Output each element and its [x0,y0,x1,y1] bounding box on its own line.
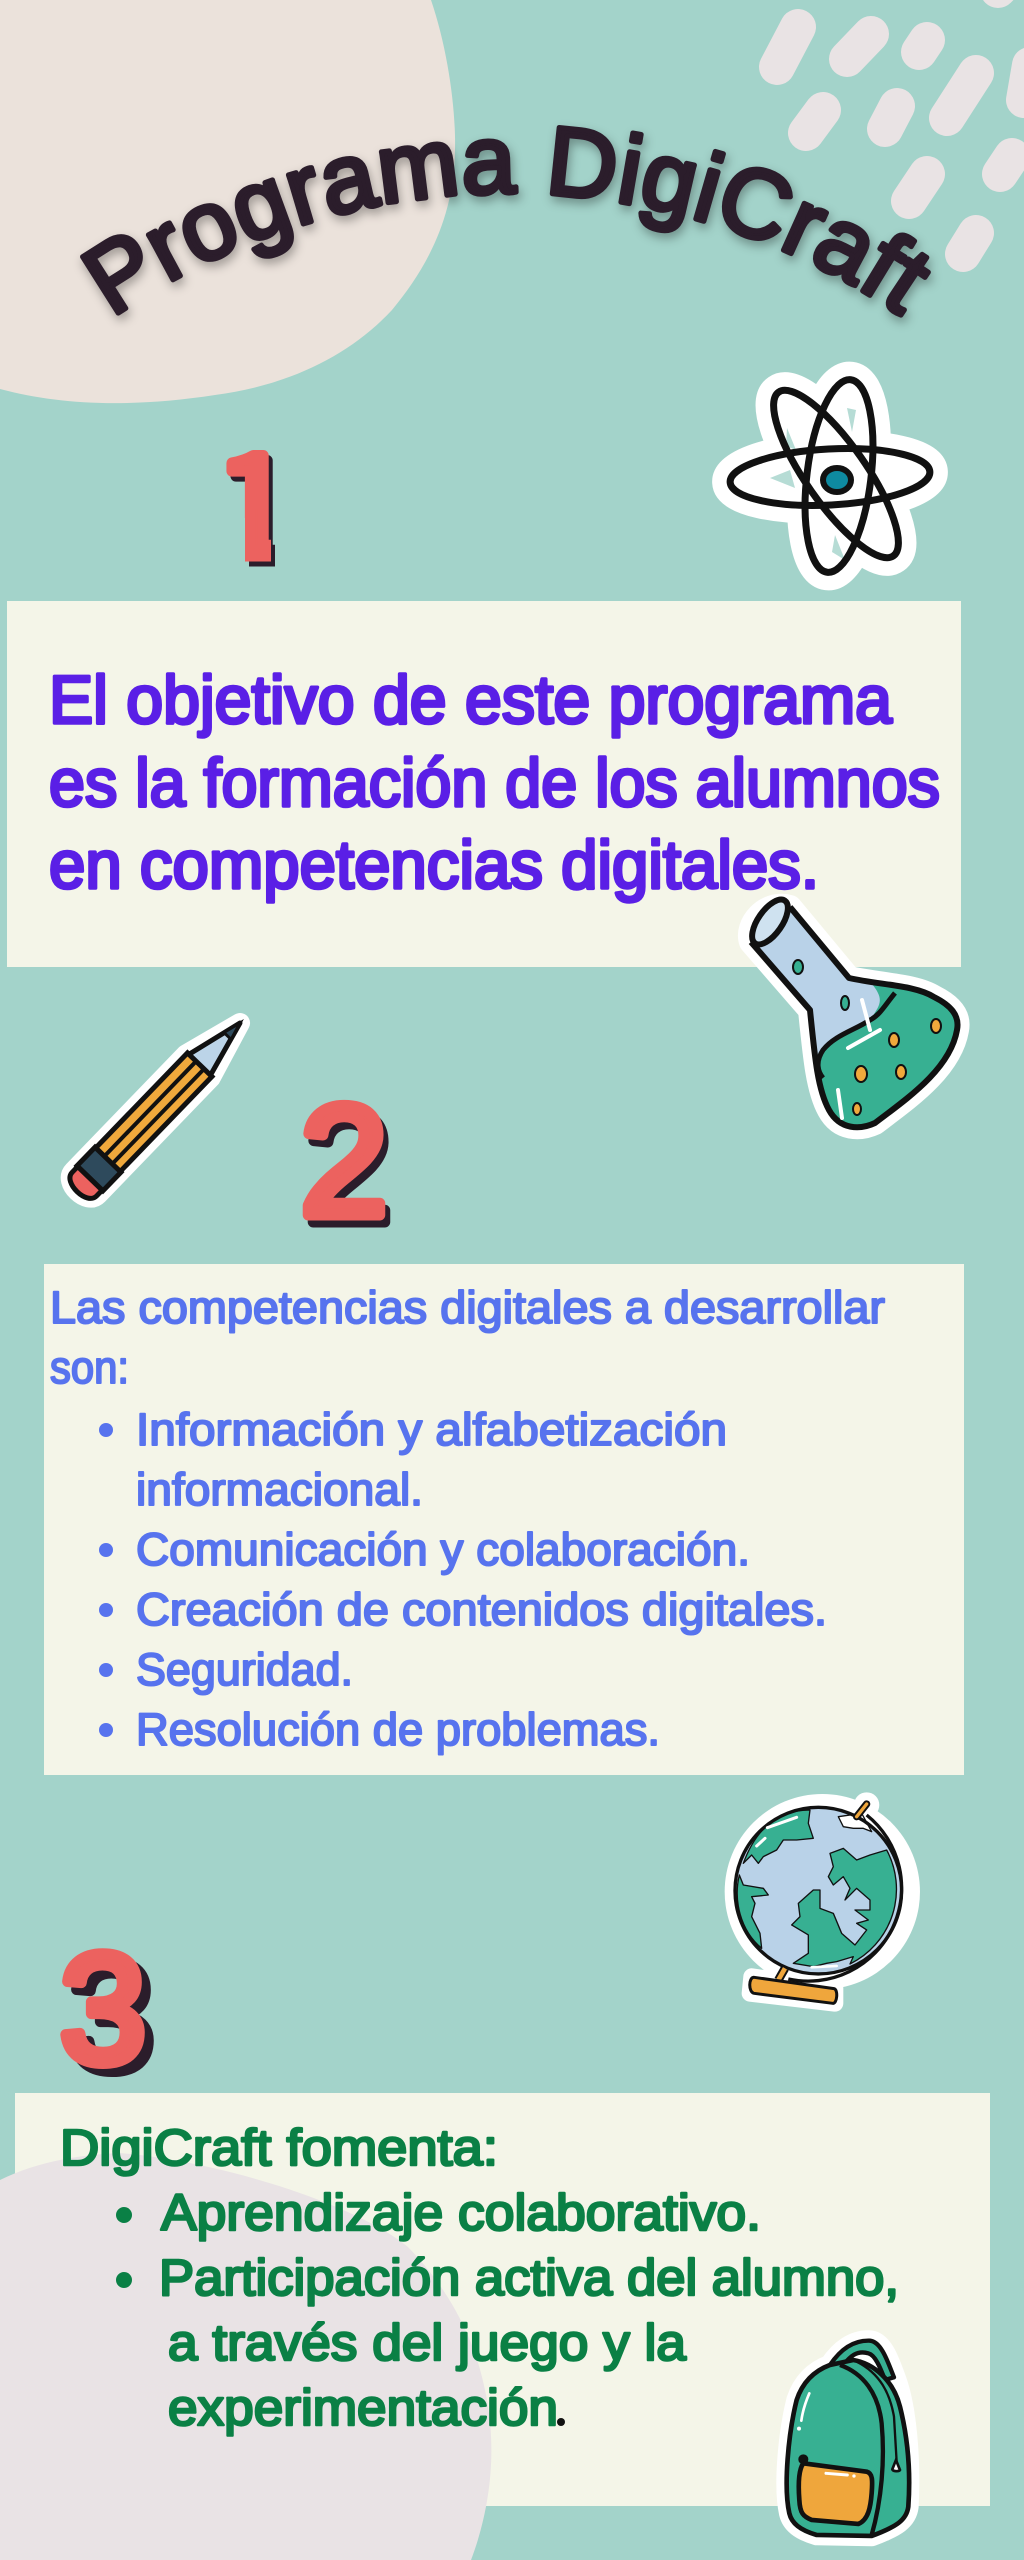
competences intro: son: [50,1342,129,1393]
competences list: Seguridad. [136,1644,353,1695]
competences intro [50,1282,885,1393]
panel 3 text: Participación activa del alumno, [159,2249,899,2306]
background blob: top left [0,0,455,403]
objective text [49,662,940,903]
number 2: 2 [300,1074,388,1249]
competences list: Creación de contenidos digitales. [136,1584,827,1635]
objective text: es la formación de los alumnos [49,745,940,821]
competences list: Información y alfabetización [136,1404,727,1455]
competences list: Resolución de problemas. [136,1704,660,1755]
competences list [99,1404,827,1755]
number 1: 1 [219,397,297,602]
competences intro: Las competencias digitales a desarrollar [50,1282,885,1333]
icon: flask sticker [745,894,958,1127]
panel 3 text [60,2119,899,2436]
panel 1: objective [7,601,961,967]
competences list: informacional. [136,1464,423,1515]
panel 3 text: DigiCraft fomenta: [60,2119,498,2176]
number 2: 2 [305,1081,393,1256]
objective text: El objetivo de este programa [49,662,892,738]
number 3: 3 [69,1930,155,2103]
title: Programa DigiCraft [78,125,936,326]
number 1 [226,450,275,566]
icon: pencil sticker [64,1010,253,1204]
panel 3 text: Aprendizaje colaborativo. [161,2184,761,2241]
background blob: bottom left [0,2153,491,2560]
panel 2: competences [44,1264,964,1775]
panel 3: DigiCraft promotes [15,2093,990,2506]
decorative capsules: top right [777,0,1024,254]
number 1: 1 [215,392,293,597]
panel 3 text: a través del juego y la [168,2314,687,2371]
objective text: en competencias digitales. [49,827,819,903]
icon: backpack sticker [787,2341,909,2536]
panel 3 text: experimentación [168,2379,558,2436]
icon: globe sticker [725,1792,920,2003]
icon: atom sticker [729,375,931,576]
competences list: Comunicación y colaboración. [136,1524,750,1575]
number 3: 3 [60,1922,146,2095]
